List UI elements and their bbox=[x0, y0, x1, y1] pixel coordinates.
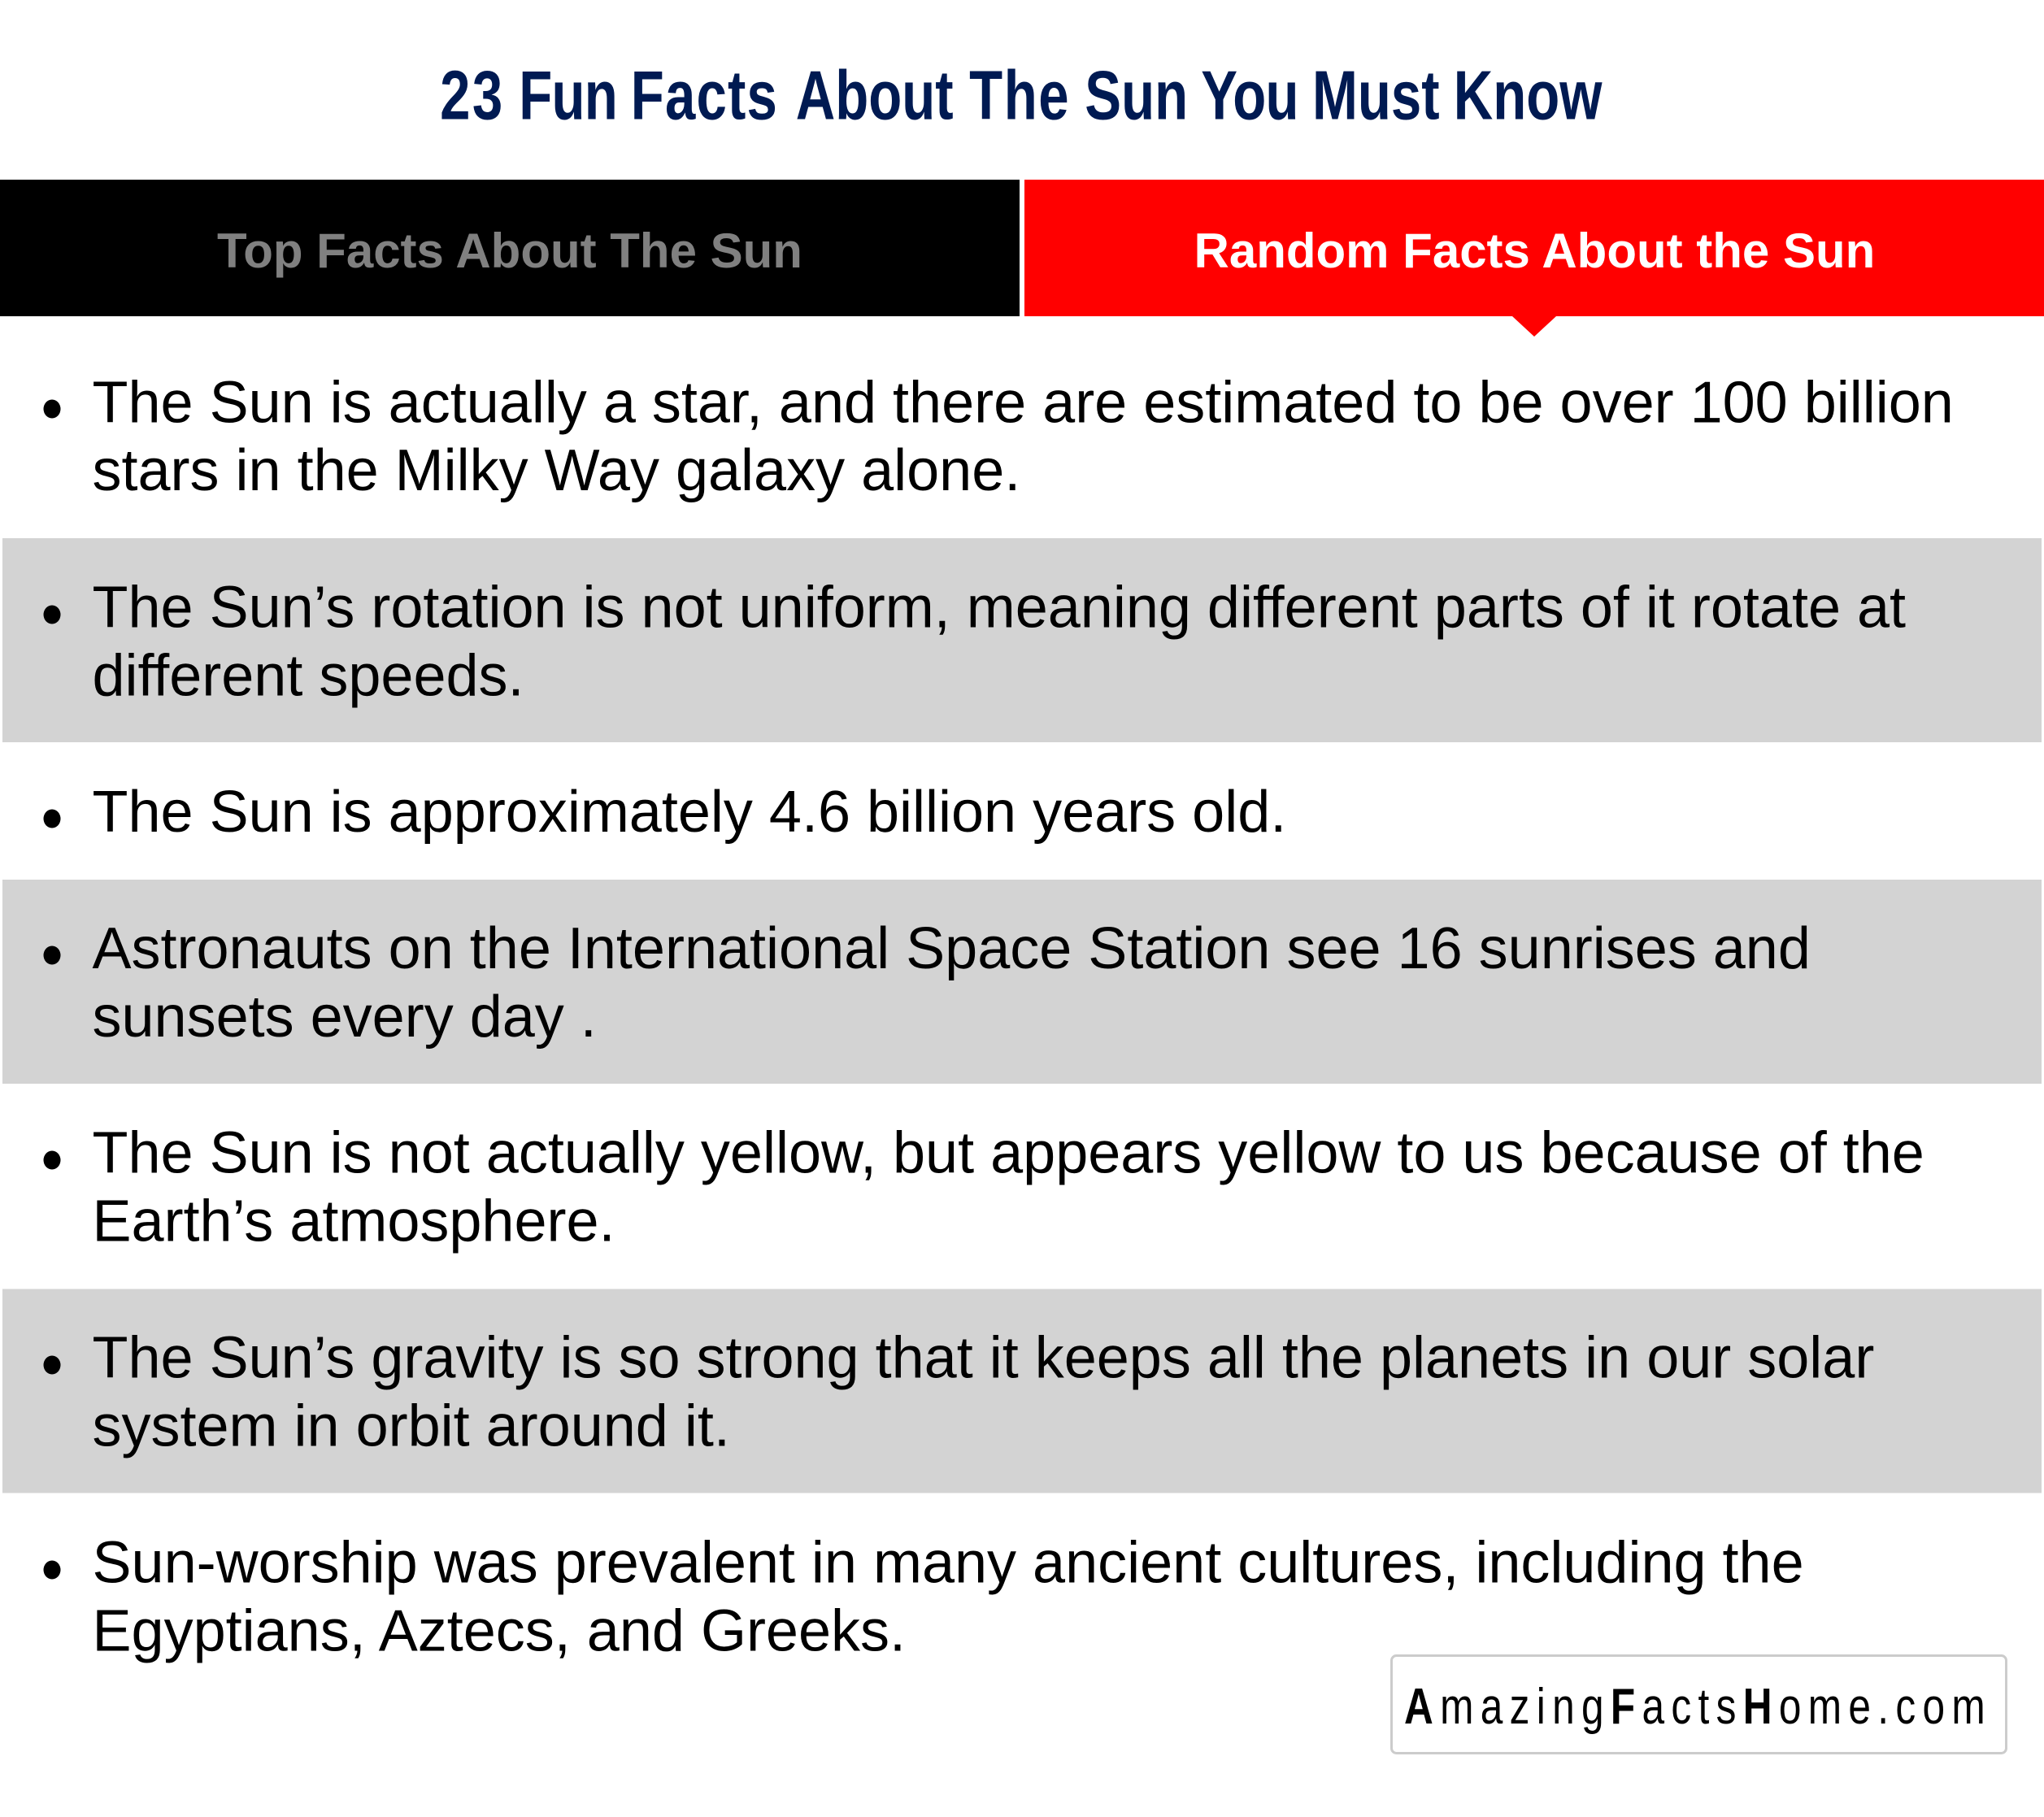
fact 5: The Sun is not actually yellow, but appears yellow to us because of the bbox=[93, 1120, 1924, 1185]
title: Fun bbox=[519, 58, 617, 134]
fact 6 row bbox=[2, 1289, 2042, 1493]
title: About bbox=[796, 58, 954, 134]
fact 6 row: The Sun’s gravity is so strong that it keeps all the planets in our solar bbox=[93, 1325, 1874, 1390]
watermark: AmazingFactsHome.com bbox=[1404, 1678, 1992, 1734]
fact 5: Earth’s atmosphere. bbox=[93, 1189, 615, 1254]
fact 7 bbox=[44, 1530, 1804, 1663]
fact 2 row: different speeds. bbox=[93, 644, 524, 709]
fact 1 bbox=[44, 371, 1954, 503]
fact 6 row: system in orbit around it. bbox=[93, 1393, 730, 1458]
fact 4 row: Astronauts on the International Space Station see 16 sunrises and bbox=[93, 916, 1811, 981]
fact 5 bbox=[44, 1120, 1924, 1254]
fact 7: Sun-worship was prevalent in many ancient cultures, including the bbox=[93, 1530, 1804, 1595]
fact 3: The Sun is approximately 4.6 billion years old. bbox=[93, 780, 1286, 845]
title: The bbox=[969, 58, 1070, 134]
title: Sun bbox=[1085, 58, 1188, 134]
fact 4 row bbox=[2, 880, 2042, 1084]
title: 23 bbox=[440, 58, 505, 134]
fact 7: Egyptians, Aztecs, and Greeks. bbox=[93, 1598, 906, 1663]
fact 2 row bbox=[2, 538, 2042, 742]
fact 4 row: sunsets every day . bbox=[93, 985, 597, 1050]
tab: top facts bbox=[0, 180, 1020, 316]
fact 2 row: The Sun’s rotation is not uniform, meaning different parts of it rotate at bbox=[93, 576, 1906, 641]
tab: random facts (active): Random Facts About the Sun bbox=[1194, 224, 1875, 278]
fact 1: The Sun is actually a star, and there are estimated to be over 100 billion bbox=[93, 371, 1954, 436]
fact 1: stars in the Milky Way galaxy alone. bbox=[93, 438, 1020, 503]
title: Must bbox=[1312, 58, 1440, 134]
title: Facts bbox=[631, 58, 778, 134]
title: You bbox=[1201, 58, 1298, 134]
tab: top facts: Top Facts About The Sun bbox=[217, 224, 802, 278]
title: Know bbox=[1454, 58, 1603, 134]
watermark bbox=[1392, 1655, 2007, 1753]
tab: random facts (active) bbox=[1024, 180, 2044, 337]
